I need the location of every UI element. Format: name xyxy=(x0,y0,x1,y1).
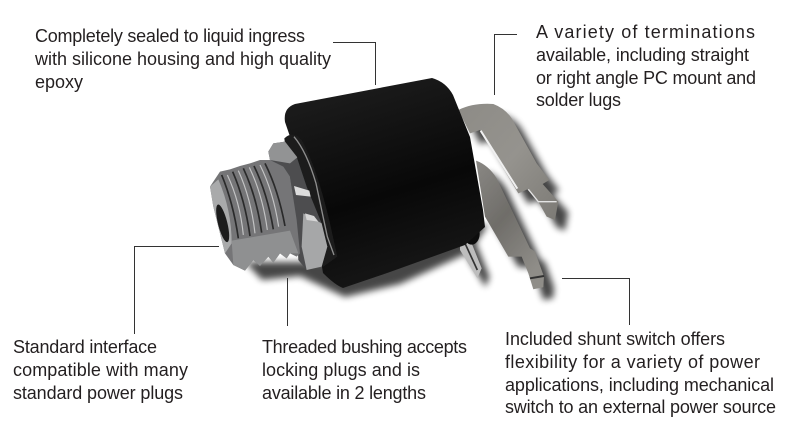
photo: sealed power jack connector xyxy=(210,78,568,300)
callout: standard interface: standard power plugs xyxy=(13,383,183,403)
callout: shunt switch: Included shunt switch offers xyxy=(505,329,725,349)
callout: silicone seal: epoxy xyxy=(35,72,83,92)
callout: terminations: or right angle PC mount and xyxy=(536,68,756,88)
callout: threaded bushing: locking plugs and is xyxy=(262,360,420,380)
callout: silicone seal xyxy=(34,26,376,92)
pin mounting blob xyxy=(464,223,480,245)
bushing lower lit flank xyxy=(232,231,298,271)
threaded bushing xyxy=(210,160,300,271)
lug: shunt switch terminal xyxy=(476,161,544,289)
washer ring xyxy=(284,135,337,267)
lug: right angle termination xyxy=(458,104,558,220)
drop shadow under the jack xyxy=(245,114,568,300)
callout: threaded bushing xyxy=(262,278,467,403)
callout: terminations xyxy=(494,22,756,110)
callout: shunt switch: flexibility for a variety of power xyxy=(505,352,760,372)
bushing bore opening xyxy=(210,179,232,253)
callout: terminations: A variety of terminations xyxy=(536,22,755,42)
callout: shunt switch xyxy=(505,278,776,417)
callout: shunt switch: applications, including mechanical xyxy=(505,375,774,395)
small PC pin xyxy=(460,227,482,278)
callout: shunt switch: switch to an external power source xyxy=(505,397,776,417)
callout: terminations: solder lugs xyxy=(536,90,621,110)
callout: threaded bushing: Threaded bushing accepts xyxy=(262,337,467,357)
callout: threaded bushing: available in 2 lengths xyxy=(262,383,426,403)
callout: standard interface: Standard interface xyxy=(13,337,157,357)
rubber housing xyxy=(285,78,485,288)
lugs group xyxy=(458,104,558,289)
hex nut xyxy=(268,142,327,270)
callout: terminations: available, including straight xyxy=(536,45,749,65)
callout: silicone seal: Completely sealed to liquid ingress xyxy=(35,26,305,46)
callout: standard interface xyxy=(13,246,219,403)
callout: standard interface: compatible with many xyxy=(13,360,188,380)
callout: silicone seal: with silicone housing and high quality xyxy=(34,49,331,69)
